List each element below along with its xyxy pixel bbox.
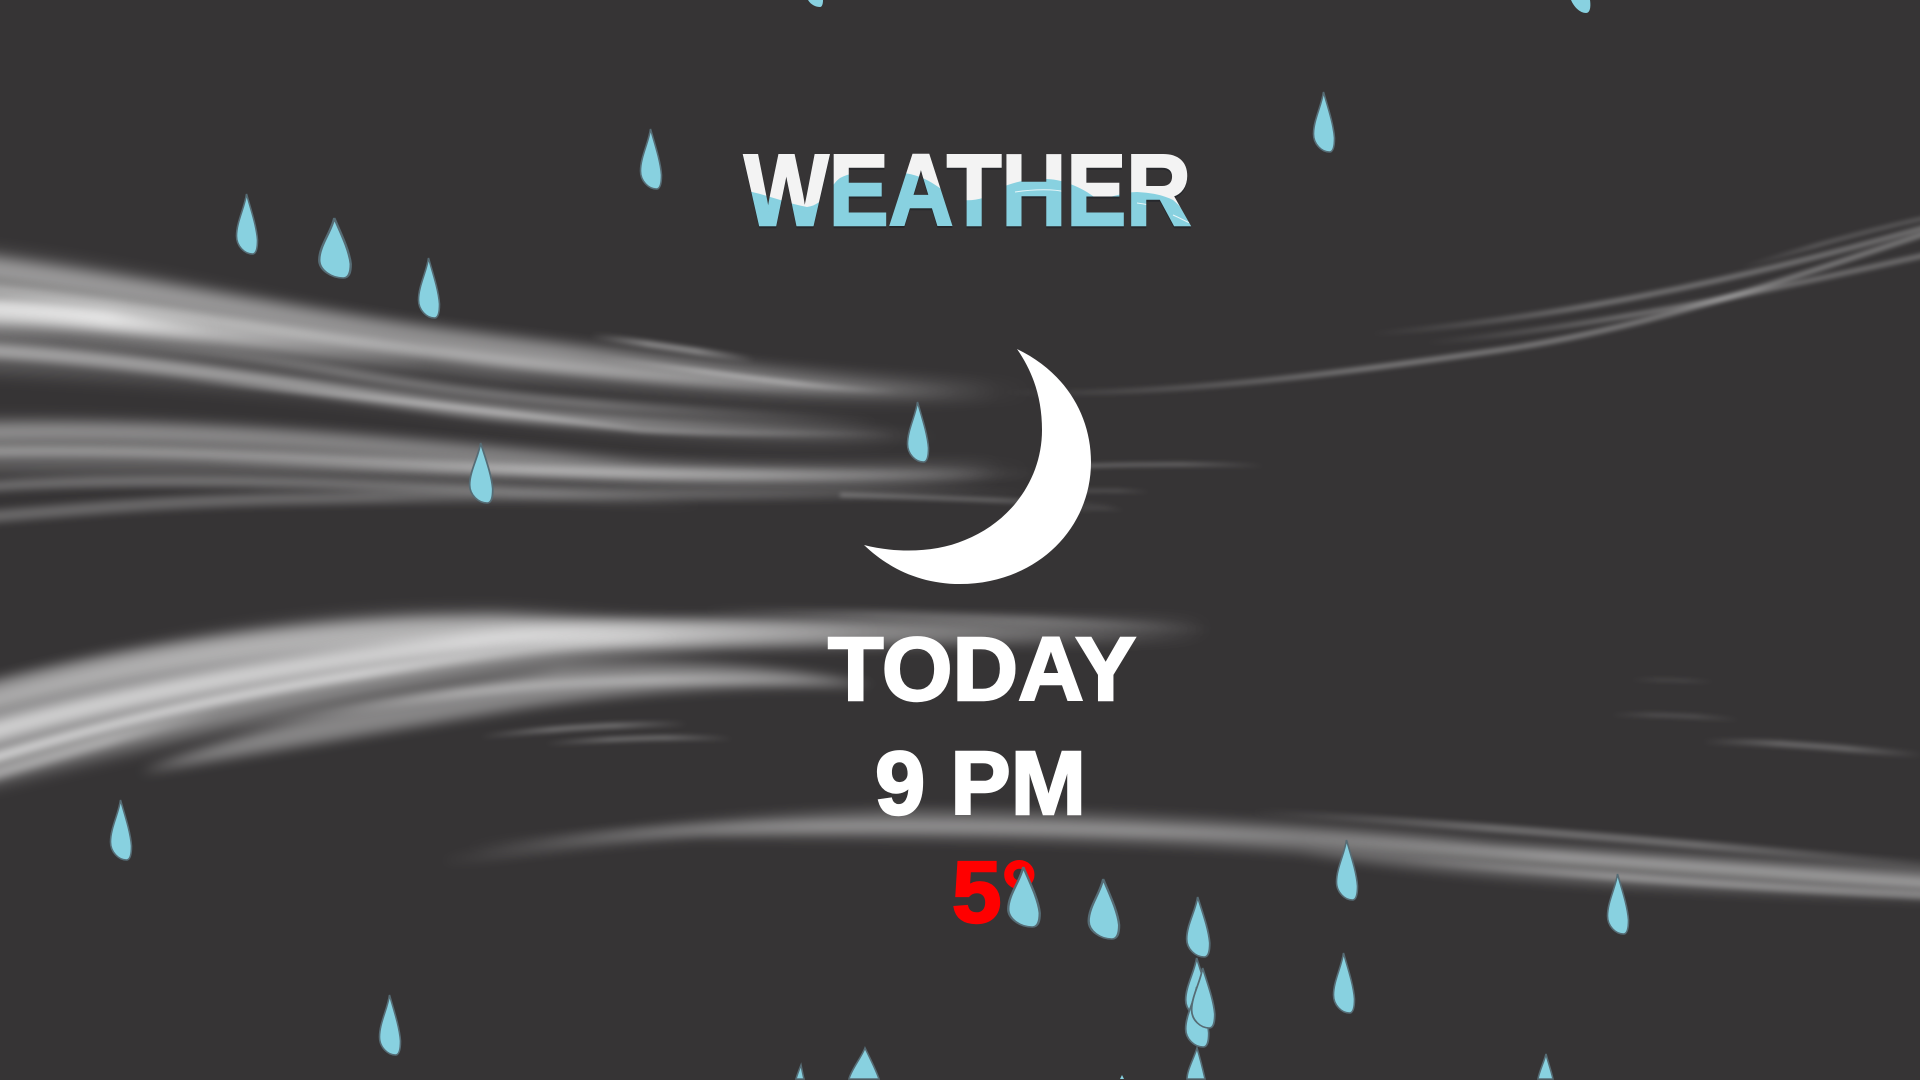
icon: rain drop: [1187, 897, 1210, 957]
icon: rain drop at bottom edge: [849, 1048, 879, 1079]
icon: rain drop: [1192, 968, 1215, 1028]
icon: rain drop: [418, 258, 440, 318]
icon: rain drop at bottom edge: [1538, 1054, 1553, 1079]
icon: rain drop: [1334, 953, 1354, 1013]
icon: rain drop: [1336, 840, 1358, 900]
icon: rain drop: [1008, 867, 1040, 927]
wind streak: upper left band: [0, 250, 1035, 439]
icon: rain drop at bottom edge: [1120, 1075, 1124, 1079]
icon: rain drop: [236, 194, 258, 254]
time label: 9 PM: [875, 734, 1086, 834]
icon: rain drop: [1186, 958, 1209, 1018]
icon: rain drop: [640, 129, 662, 189]
day label: TODAY: [828, 620, 1136, 720]
wind streak: lower right band: [440, 680, 1920, 898]
icon: crescent moon: [864, 349, 1091, 584]
rain drops: [110, 0, 1628, 1079]
icon: rain drop at top edge: [808, 0, 823, 7]
icon: rain drop at bottom edge: [796, 1065, 804, 1079]
wind streak: lower left arc: [0, 610, 1215, 790]
icon: rain drop: [380, 995, 400, 1055]
icon: rain drop: [1186, 987, 1209, 1047]
icon: rain drop: [319, 218, 351, 278]
title: WEATHER: [744, 135, 1191, 247]
wind streak: right of moon: [1000, 217, 1920, 510]
icon: rain drop at top edge: [1571, 0, 1590, 13]
icon: rain drop: [908, 402, 928, 462]
temperature: 5°: [952, 844, 1037, 941]
icon: rain drop: [110, 800, 132, 860]
wind streak: middle left band: [0, 422, 1120, 518]
icon: rain drop at bottom edge: [1187, 1048, 1205, 1079]
icon: rain drop: [1608, 874, 1628, 934]
icon: rain drop: [1314, 92, 1334, 152]
icon: rain drop: [1089, 879, 1119, 939]
icon: rain drop: [470, 443, 493, 503]
